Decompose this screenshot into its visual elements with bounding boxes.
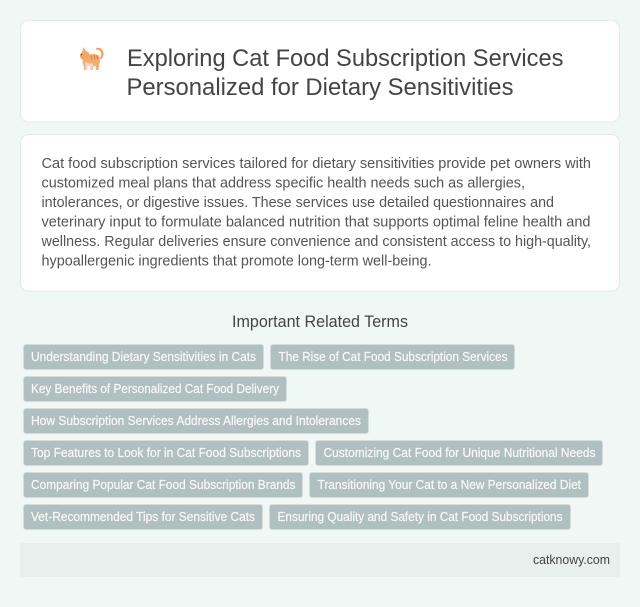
tag: vet tips xyxy=(24,504,262,530)
tag: transitioning diet: Transitioning Your Cat to a New Personalized Diet xyxy=(318,478,581,492)
tag: top features: Top Features to Look for in Cat Food Subscriptions xyxy=(31,446,301,460)
tag: comparing brands xyxy=(24,472,302,498)
footer bar xyxy=(20,543,620,577)
title text: Personalized for Dietary Sensitivities xyxy=(126,74,514,101)
description text: hypoallergenic ingredients that promote long-term well-being. xyxy=(42,254,432,270)
footer bar: catknowy.com xyxy=(533,552,610,567)
tag: quality and safety: Ensuring Quality and Safety in Cat Food Subscriptions xyxy=(278,510,562,524)
tag: key benefits: Key Benefits of Personalized Cat Food Delivery xyxy=(31,382,280,396)
tag: allergies and intolerances xyxy=(24,408,368,434)
tag: vet tips: Vet-Recommended Tips for Sensitive Cats xyxy=(31,510,255,524)
tag: allergies and intolerances: How Subscription Services Address Allergies and Intolerances xyxy=(31,414,361,428)
tag: quality and safety xyxy=(270,504,570,530)
tag: understanding dietary sensitivities: Understanding Dietary Sensitivities in Cats xyxy=(31,350,256,364)
tag list xyxy=(24,344,602,530)
tag: rise of subscriptions: The Rise of Cat Food Subscription Services xyxy=(278,350,508,364)
tag: key benefits xyxy=(24,376,286,402)
description text: veterinary input to formulate balanced nutrition that supports optimal feline health and xyxy=(42,214,590,230)
icon: orange cat xyxy=(80,47,104,70)
title text xyxy=(126,45,564,101)
tag: customizing cat food: Customizing Cat Food for Unique Nutritional Needs xyxy=(324,446,596,460)
panel: description card xyxy=(20,134,620,291)
tag: customizing cat food xyxy=(316,440,602,466)
heading: important related terms: Important Related Terms xyxy=(232,313,408,331)
panel: title card xyxy=(20,20,620,122)
tag: rise of subscriptions xyxy=(270,344,514,370)
description text: wellness. Regular deliveries ensure convenience and consistent access to high-quality, xyxy=(41,234,591,250)
tag: top features xyxy=(24,440,308,466)
tag: understanding dietary sensitivities xyxy=(24,344,264,370)
description text: intolerances, or digestive issues. These services use detailed questionnaires and xyxy=(42,195,554,211)
description text: customized meal plans that address specific health needs such as allergies, xyxy=(42,176,525,192)
description text xyxy=(41,156,591,270)
tag: transitioning diet xyxy=(310,472,588,498)
description text: Cat food subscription services tailored for dietary sensitivities provide pet owners with xyxy=(42,156,591,172)
title text: Exploring Cat Food Subscription Services xyxy=(127,45,564,72)
tag: comparing brands: Comparing Popular Cat Food Subscription Brands xyxy=(31,478,296,492)
